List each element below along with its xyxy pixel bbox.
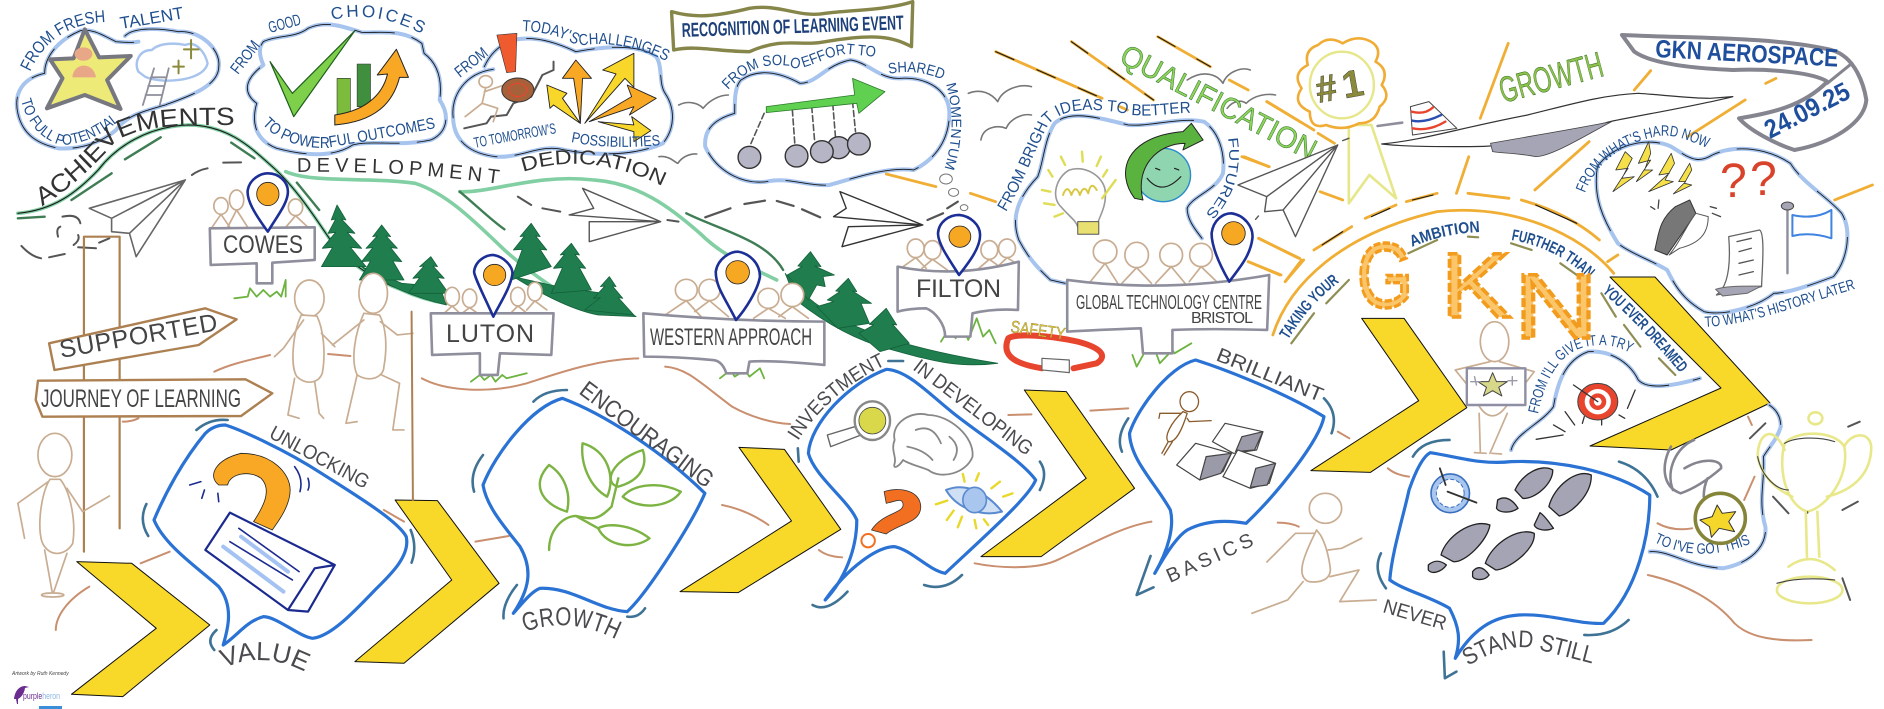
location: Cowes sign with pin and people: COWES — [223, 231, 303, 259]
banner: recognition of learning event — [672, 2, 913, 52]
trophy — [1750, 412, 1871, 603]
brown journey route — [56, 354, 1812, 640]
cloud: from good choices to powerful outcomes — [230, 4, 448, 156]
heading: qualification: QUALIFICATION — [1122, 46, 1318, 158]
bubble: encouraging growth — [471, 380, 713, 638]
location: Global Technology Centre sign with pin and people: BRISTOL — [1191, 310, 1253, 327]
text: FROM — [230, 40, 260, 74]
cloud: from fresh talent to full potential: TO FULL POTENTIAL — [22, 98, 119, 145]
text: INVESTMENT — [787, 352, 882, 440]
bubble: encouraging growth: GROWTH — [522, 607, 622, 638]
bubble: brilliant basics — [1118, 348, 1336, 596]
icon: light bulb — [1042, 152, 1116, 234]
location: Luton sign with pin and people: LUTON — [446, 320, 534, 348]
icon: green plant — [540, 443, 681, 550]
cloud: from today's challenges to tomorrow's possibilities: TODAY'S CHALLENGES — [523, 20, 670, 60]
heading: achievements / development / dedication: ACHIEVEMENTS — [39, 108, 234, 206]
hills: green path lines — [18, 125, 783, 310]
bubble: never stand still: STAND STILL — [1462, 630, 1592, 664]
cloud: from good choices to powerful outcomes: CHOICES — [332, 4, 425, 32]
banner: GKN Aerospace date: 24.09.25 — [1759, 76, 1855, 144]
cloud: from fresh talent to full potential: TALENT — [120, 6, 182, 28]
rosette: #1 award: #1 — [1312, 62, 1367, 112]
icon: eye with rays — [936, 473, 1013, 528]
arc: taking your ambition further than you ever dreamed with GKN: FURTHER THAN — [1512, 229, 1596, 276]
concorde aircraft — [1378, 93, 1733, 157]
text: FROM BRIGHT IDEAS TO BETTER — [997, 98, 1190, 211]
location: Global Technology Centre sign with pin and people — [1067, 213, 1269, 367]
icon: orange question mark — [861, 490, 921, 547]
cloud: from what's hard now to what's history later — [1576, 125, 1855, 327]
GKN lettering: K — [1441, 235, 1511, 337]
icon: stick figure — [1159, 392, 1211, 455]
icon: red question marks — [1720, 153, 1777, 208]
location: Western Approach sign with pin and people: WESTERN APPROACH — [650, 324, 812, 351]
text: BRILLIANT — [1216, 348, 1324, 400]
bubble: unlocking value: VALUE — [218, 642, 311, 672]
location: Western Approach sign with pin and people — [643, 252, 824, 378]
icon: star with person — [47, 29, 131, 109]
rosette: #1 award — [1298, 38, 1396, 203]
bubble: brilliant basics: BASICS — [1166, 534, 1253, 582]
icon: scroll — [1716, 230, 1763, 296]
heading: growth: GROWTH — [1494, 44, 1607, 111]
medal — [1665, 440, 1745, 543]
heading: achievements / development / dedication: DEVELOPMENT — [298, 158, 500, 183]
person running — [1252, 493, 1376, 613]
cloud: from today's challenges to tomorrow's possibilities — [450, 20, 674, 159]
arc: taking your ambition further than you ever dreamed with GKN: TAKING YOUR — [1278, 274, 1340, 338]
person by signpost — [18, 433, 109, 597]
cloud: from good choices to powerful outcomes: TO POWERFUL OUTCOMES — [264, 116, 435, 148]
arc: taking your ambition further than you ever dreamed with GKN: YOU EVER DREAMED — [1604, 284, 1687, 372]
artist credit and logo: purpleheron — [23, 691, 60, 701]
bubble: unlocking value — [142, 418, 416, 672]
arc: taking your ambition further than you ever dreamed with GKN: AMBITION — [1412, 221, 1479, 247]
icon: flag — [1781, 202, 1831, 273]
text: FROM I'LL GIVE IT A TRY — [1528, 334, 1634, 414]
icon: open padlock — [190, 453, 335, 612]
icon: climber and gear — [464, 62, 554, 128]
text: FROM — [454, 46, 488, 78]
bubble: investment in developing: IN DEVELOPING — [913, 359, 1032, 454]
icon: brain — [893, 414, 973, 475]
cloud: from solo effort to shared momentum: MOMENTUM — [944, 82, 962, 170]
location: Luton sign with pin and people — [431, 255, 554, 382]
text: ENCOURAGING — [580, 380, 713, 486]
icon: footprints — [1428, 468, 1591, 580]
paper plane 3 with dashed trail — [705, 174, 968, 247]
bubble: investment in developing — [787, 352, 1046, 609]
banner: GKN Aerospace date — [1622, 35, 1866, 150]
icon: three cubes — [1177, 423, 1276, 488]
GKN lettering: N — [1514, 256, 1598, 358]
icon: bars and rising arrow — [335, 49, 408, 125]
cloud: from what's hard now to what's history later: TO WHAT'S HISTORY LATER — [1704, 280, 1855, 327]
two walking figures — [275, 273, 413, 500]
person holding certificate — [1455, 322, 1534, 454]
yellow chevrons — [71, 277, 1770, 697]
icon: red exclamation — [497, 33, 517, 73]
icon: lightning bolts — [1613, 142, 1692, 194]
cloud: from fresh talent to full potential — [14, 6, 221, 150]
signpost: supported and journey of learning: SUPPORTED — [57, 309, 220, 364]
heading: achievements / development / dedication — [39, 108, 666, 206]
text: FROM SOLO EFFORT TO — [722, 44, 876, 90]
signpost: supported and journey of learning: JOURNEY OF LEARNING — [41, 385, 241, 413]
GKN lettering: G — [1357, 225, 1413, 327]
bubble: never stand still — [1376, 438, 1659, 680]
signpost: supported and journey of learning — [36, 237, 272, 552]
paper plane 4 — [1238, 138, 1349, 237]
banner: GKN Aerospace date: GKN AEROSPACE — [1655, 35, 1839, 73]
cloud: from solo effort to shared momentum — [703, 44, 962, 188]
text: FROM FRESH — [20, 10, 104, 71]
icon: red question marks: ? — [1720, 155, 1747, 208]
icon: small cloud with ladder — [137, 40, 208, 105]
icon: red question marks: ? — [1750, 153, 1777, 206]
safety belt with label — [1006, 317, 1102, 373]
location: Filton sign with pin and people: FILTON — [916, 275, 1001, 303]
cloud: from bright ideas to better futures: FUTURES — [1207, 138, 1239, 218]
location: Global Technology Centre sign with pin and people: GLOBAL TECHNOLOGY CENTRE — [1076, 292, 1262, 314]
cloud: from good choices to powerful outcomes: GOOD — [268, 14, 300, 32]
text: UNLOCKING — [270, 426, 368, 487]
cloud: from I'll give it a try to I've got this: TO I'VE GOT THIS — [1656, 532, 1750, 554]
forest trees — [321, 205, 998, 365]
icon: smiling earth with green arrow — [1126, 123, 1203, 202]
location: Filton sign with pin and people — [898, 215, 1019, 343]
cloud: from today's challenges to tomorrow's possibilities: TO TOMORROW'S — [473, 123, 556, 148]
text: FROM WHAT'S HARD NOW — [1576, 125, 1711, 192]
birds — [659, 69, 1276, 163]
GKN lettering — [1357, 225, 1598, 358]
cloud: from solo effort to shared momentum: SHARED — [888, 62, 944, 78]
text: NEVER — [1384, 599, 1446, 630]
artist credit and logo: Artwork by Ruth Kennedy — [11, 671, 69, 677]
artist credit and logo — [11, 671, 69, 709]
paper plane 2 with dashed trail — [518, 188, 679, 242]
safety belt with label: SAFETY — [1009, 317, 1067, 344]
paper plane 1 with dashed trail — [21, 162, 241, 258]
icon: magnifier — [827, 401, 890, 447]
sunburst rays — [886, 37, 1872, 282]
heading: achievements / development / dedication: DEDICATION — [521, 150, 666, 186]
arc: taking your ambition further than you ever dreamed with GKN — [1271, 192, 1687, 376]
cloud: from today's challenges to tomorrow's possibilities: POSSIBILITIES — [572, 132, 660, 147]
icon: green tick — [270, 31, 355, 117]
cloud: from bright ideas to better futures — [997, 98, 1239, 286]
location: Cowes sign with pin and people — [210, 173, 315, 298]
icon: burst of arrows — [547, 53, 656, 142]
icon: newton's cradle with green arrow — [738, 78, 885, 168]
icon: target with arrows — [1536, 383, 1635, 439]
icon: purple heron — [14, 686, 29, 704]
icon: stopwatch — [1431, 468, 1476, 513]
banner: recognition of learning event: RECOGNITION OF LEARNING EVENT — [681, 12, 904, 42]
icon: clapping hands — [1651, 200, 1721, 255]
cloud: from I'll give it a try to I've got this — [1509, 334, 1783, 570]
